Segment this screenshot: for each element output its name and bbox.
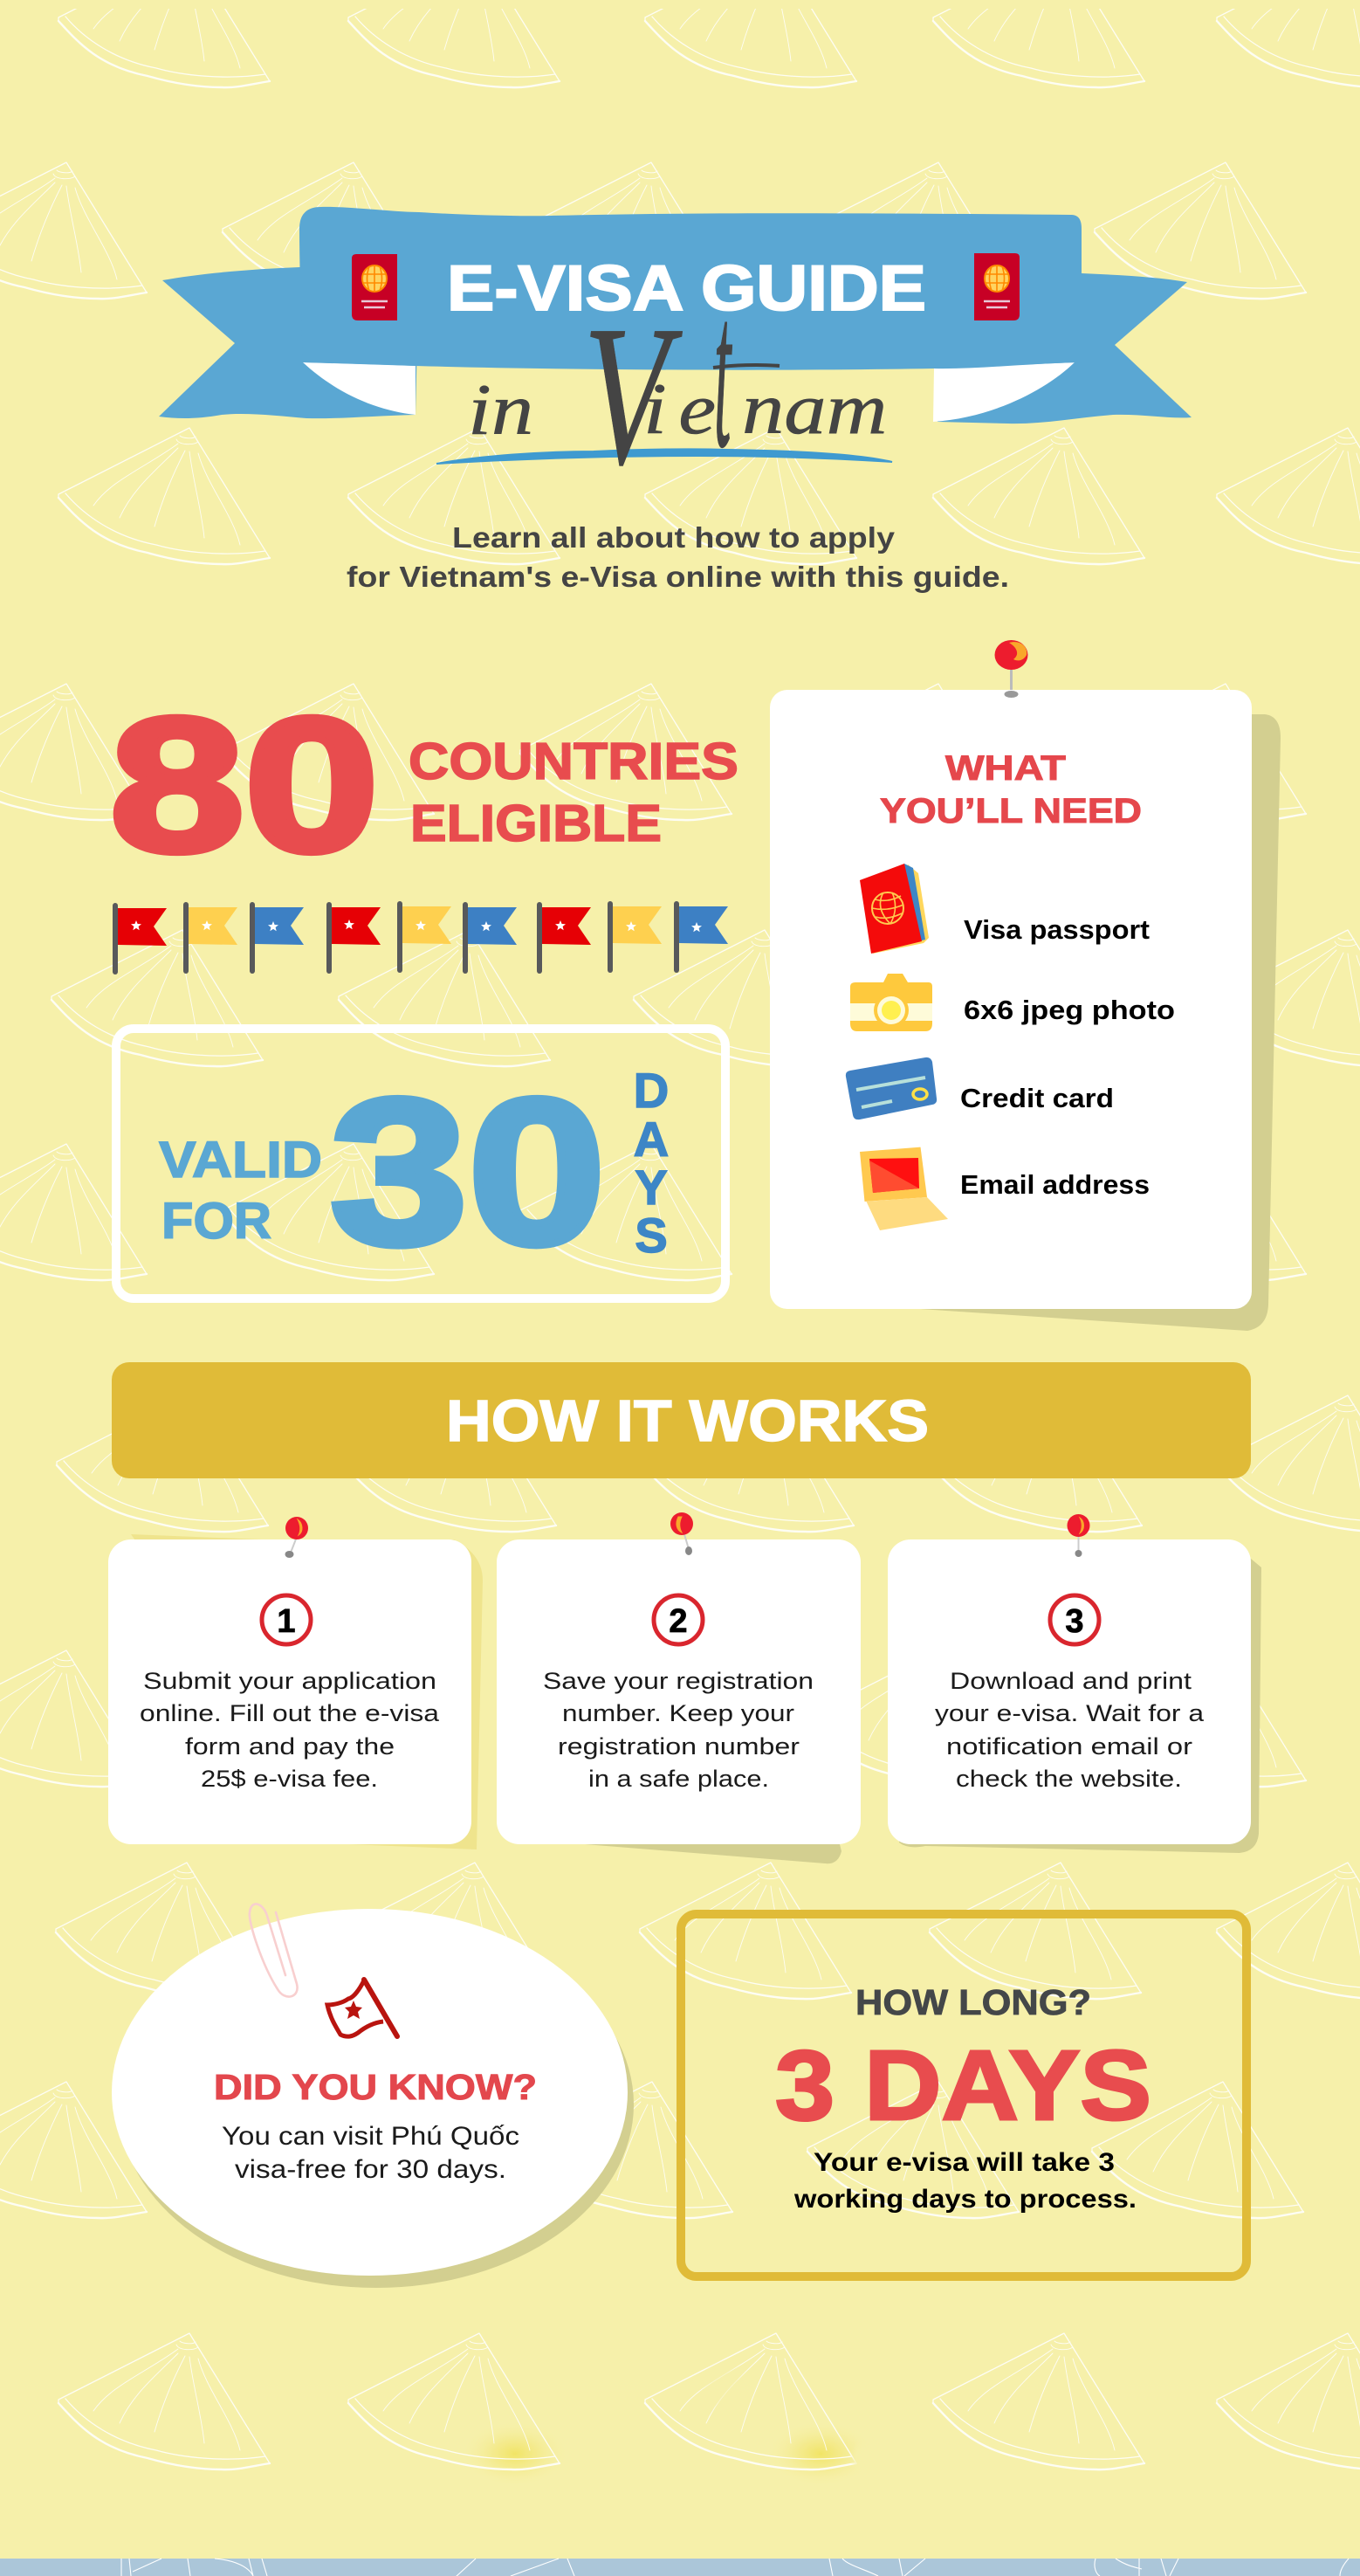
step number 3: 3 [1065, 1603, 1084, 1640]
card [108, 1539, 471, 1844]
heading: what you'll need [880, 749, 1142, 830]
heading: what you'll need: WHAT [945, 749, 1066, 788]
ellipse [112, 1909, 628, 2276]
step 2 text: registration number [558, 1733, 800, 1760]
panel: valid for 30 days: 30 [330, 1057, 606, 1288]
step number 3 [1050, 1595, 1099, 1644]
script underline [436, 449, 892, 464]
heading: what you'll need: YOU’LL NEED [880, 792, 1142, 830]
heading: E-VISA GUIDE: E-VISA GUIDE [447, 253, 926, 324]
ribbon: white right fold [933, 362, 1075, 422]
step 2 text: number. Keep your [562, 1700, 794, 1726]
text: email address: Email address [960, 1169, 1150, 1200]
step 3 text: your e-visa. Wait for a [935, 1700, 1205, 1726]
icon: right passport [974, 253, 1020, 320]
icon: vietnam flag [327, 1980, 397, 2036]
step 3 text: Download and print [950, 1668, 1192, 1694]
card [497, 1539, 861, 1844]
card shadow [131, 1534, 483, 1849]
ribbon: left tail [159, 262, 419, 418]
text: visa passport: Visa passport [964, 914, 1150, 945]
ribbon: right tail [938, 262, 1192, 424]
card [770, 690, 1252, 1309]
heading: did you know: DID YOU KNOW? [214, 2067, 537, 2107]
card shadow [920, 714, 1281, 1331]
step number 2: 2 [669, 1603, 688, 1640]
step number 1 [262, 1595, 311, 1644]
icon: pushpin [285, 1517, 308, 1558]
row of flags [113, 901, 728, 975]
stat: 80 countries eligible: COUNTRIES [409, 733, 738, 790]
panel: step 1 [108, 1517, 483, 1849]
icon: left passport [352, 254, 397, 320]
subtitle: for Vietnam's e-Visa online with this guide. [347, 561, 1009, 593]
subtitle [347, 521, 1009, 593]
step 3 text [935, 1668, 1205, 1792]
stat: 80 countries eligible [110, 679, 738, 892]
footer strip [0, 2559, 1360, 2576]
panel: step 2 [497, 1512, 861, 1863]
icon: laptop [860, 1147, 948, 1230]
step 2 text [543, 1668, 814, 1792]
icon: credit card [846, 1057, 937, 1119]
heading bar: how it works: HOW IT WORKS [446, 1388, 929, 1454]
step 1 text [140, 1668, 440, 1792]
step number 2 [654, 1595, 703, 1644]
panel: valid for 30 days: S [635, 1208, 668, 1263]
panel: valid for 30 days: Y [635, 1160, 668, 1215]
stat: 80 countries eligible: 80 [110, 679, 379, 892]
step 1 text: form and pay the [185, 1733, 395, 1760]
heading: in Vietnam script: t [714, 251, 732, 492]
card shadow [899, 1559, 1261, 1853]
panel: valid for 30 days: VALID [159, 1132, 322, 1188]
heading: in Vietnam script: in [468, 368, 533, 451]
step 2 text: Save your registration [543, 1668, 814, 1694]
panel: how long [681, 1914, 1247, 2276]
step 1 text: 25$ e-visa fee. [201, 1766, 378, 1792]
step 1 text: online. Fill out the e-visa [140, 1700, 440, 1726]
panel: valid for 30 days [116, 1029, 725, 1298]
icon: red passport [860, 864, 929, 954]
panel: how long: working days to process. [793, 2185, 1137, 2214]
step 3 text: notification email or [946, 1733, 1192, 1760]
icon: pushpin [670, 1512, 693, 1555]
body text: You can visit Phú Quốc [222, 2122, 519, 2151]
card shadow [585, 1844, 841, 1863]
header banner [159, 207, 1192, 506]
panel: how long: Your e-visa will take 3 [814, 2148, 1115, 2177]
ribbon: white left fold [303, 362, 416, 415]
step 3 text: check the website. [956, 1766, 1182, 1792]
heading: in Vietnam script: nam [742, 368, 887, 450]
heading bar: how it works [112, 1362, 1251, 1478]
step 2 text: in a safe place. [588, 1766, 769, 1792]
panel: valid for 30 days: FOR [161, 1193, 271, 1250]
body text: visa-free for 30 days. [235, 2155, 506, 2184]
step number 1: 1 [277, 1603, 296, 1640]
ellipse shadow [119, 1921, 634, 2288]
heading: in Vietnam script [468, 251, 887, 506]
icon: pushpin [995, 640, 1028, 698]
ribbon: main band [299, 207, 1082, 370]
icon: camera [850, 974, 932, 1031]
panel: what you'll need [770, 640, 1281, 1331]
step 1 text: Submit your application [143, 1668, 436, 1694]
body text [222, 2122, 519, 2184]
heading: in Vietnam script: ie [643, 368, 716, 450]
panel: valid for 30 days: A [634, 1112, 669, 1167]
panel: valid for 30 days: D [634, 1063, 669, 1118]
icon: paperclip [250, 1904, 298, 1997]
subtitle: Learn all about how to apply [452, 521, 896, 554]
heading: in Vietnam script: V [583, 284, 683, 506]
card [888, 1539, 1251, 1844]
panel: how long: 3 DAYS [775, 2030, 1151, 2140]
panel: step 3 [888, 1514, 1261, 1853]
text: credit card: Credit card [960, 1083, 1114, 1113]
text: 6x6 jpeg photo: 6x6 jpeg photo [964, 995, 1175, 1025]
panel: did you know [112, 1904, 634, 2288]
stat: 80 countries eligible: ELIGIBLE [410, 795, 662, 852]
icon: pushpin [1067, 1514, 1089, 1557]
panel: how long: HOW LONG? [855, 1982, 1091, 2022]
